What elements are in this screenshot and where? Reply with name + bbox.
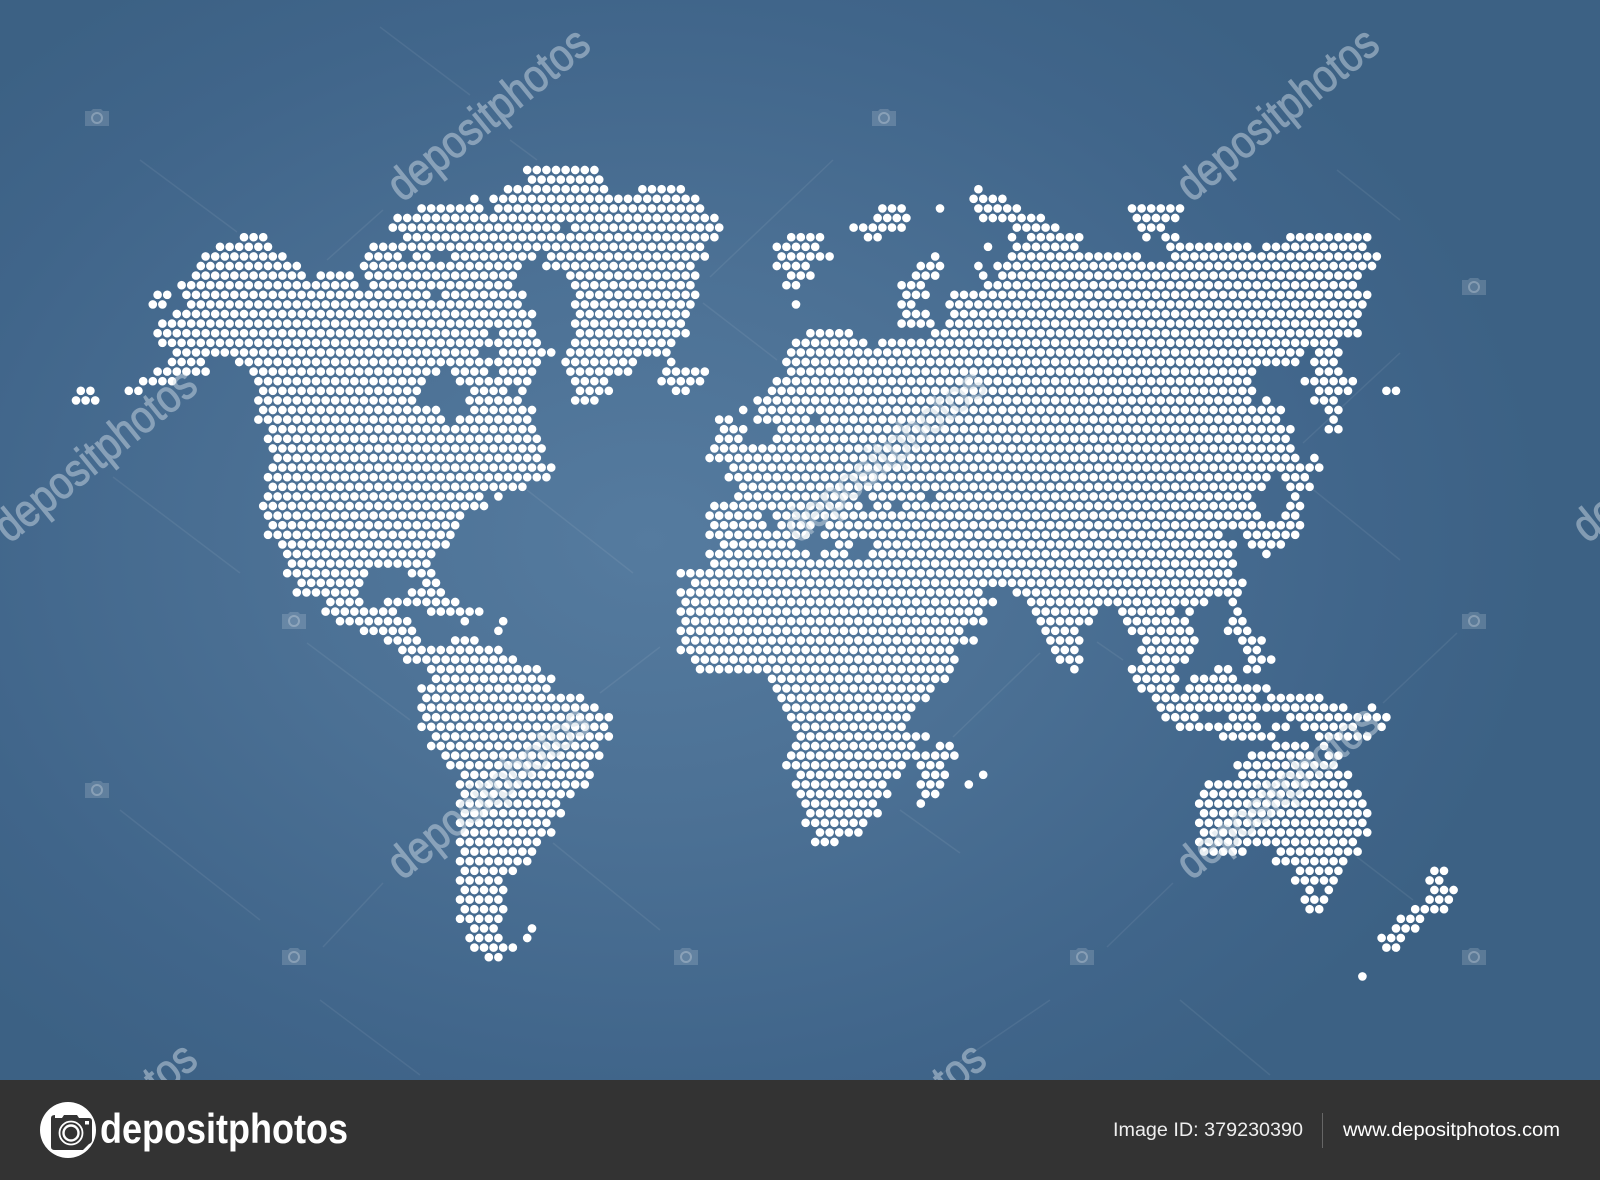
watermark text row 3	[376, 694, 1388, 889]
icon: camera logo	[40, 1102, 96, 1158]
footer banner	[0, 1080, 1600, 1180]
dotted world map	[76, 170, 1454, 976]
continent: North America, Central America and Greenland	[76, 170, 719, 631]
watermark text row 4	[0, 1031, 995, 1180]
watermark text row 2	[0, 357, 1600, 552]
watermark text row 2: depositphotos	[772, 357, 995, 552]
image id text: Image ID: 379230390	[1113, 1119, 1303, 1141]
continents: Eurasia and Africa	[681, 189, 1396, 842]
continent: South America	[388, 640, 609, 957]
islands: Iceland, Svalbard and Scandinavia	[777, 208, 940, 324]
watermark text row 1	[376, 16, 1388, 211]
islands: Southeast Asia and continent: Australia	[1137, 679, 1386, 909]
website text: www.depositphotos.com	[1342, 1119, 1560, 1141]
watermark text row 3: depositphotos	[376, 694, 599, 889]
camera watermark icons	[85, 109, 1486, 965]
logo wordmark: depositphotos	[100, 1105, 348, 1152]
watermark text row 3: depositphotos	[1165, 694, 1388, 889]
islands: New Zealand and remote dots	[1362, 871, 1454, 976]
